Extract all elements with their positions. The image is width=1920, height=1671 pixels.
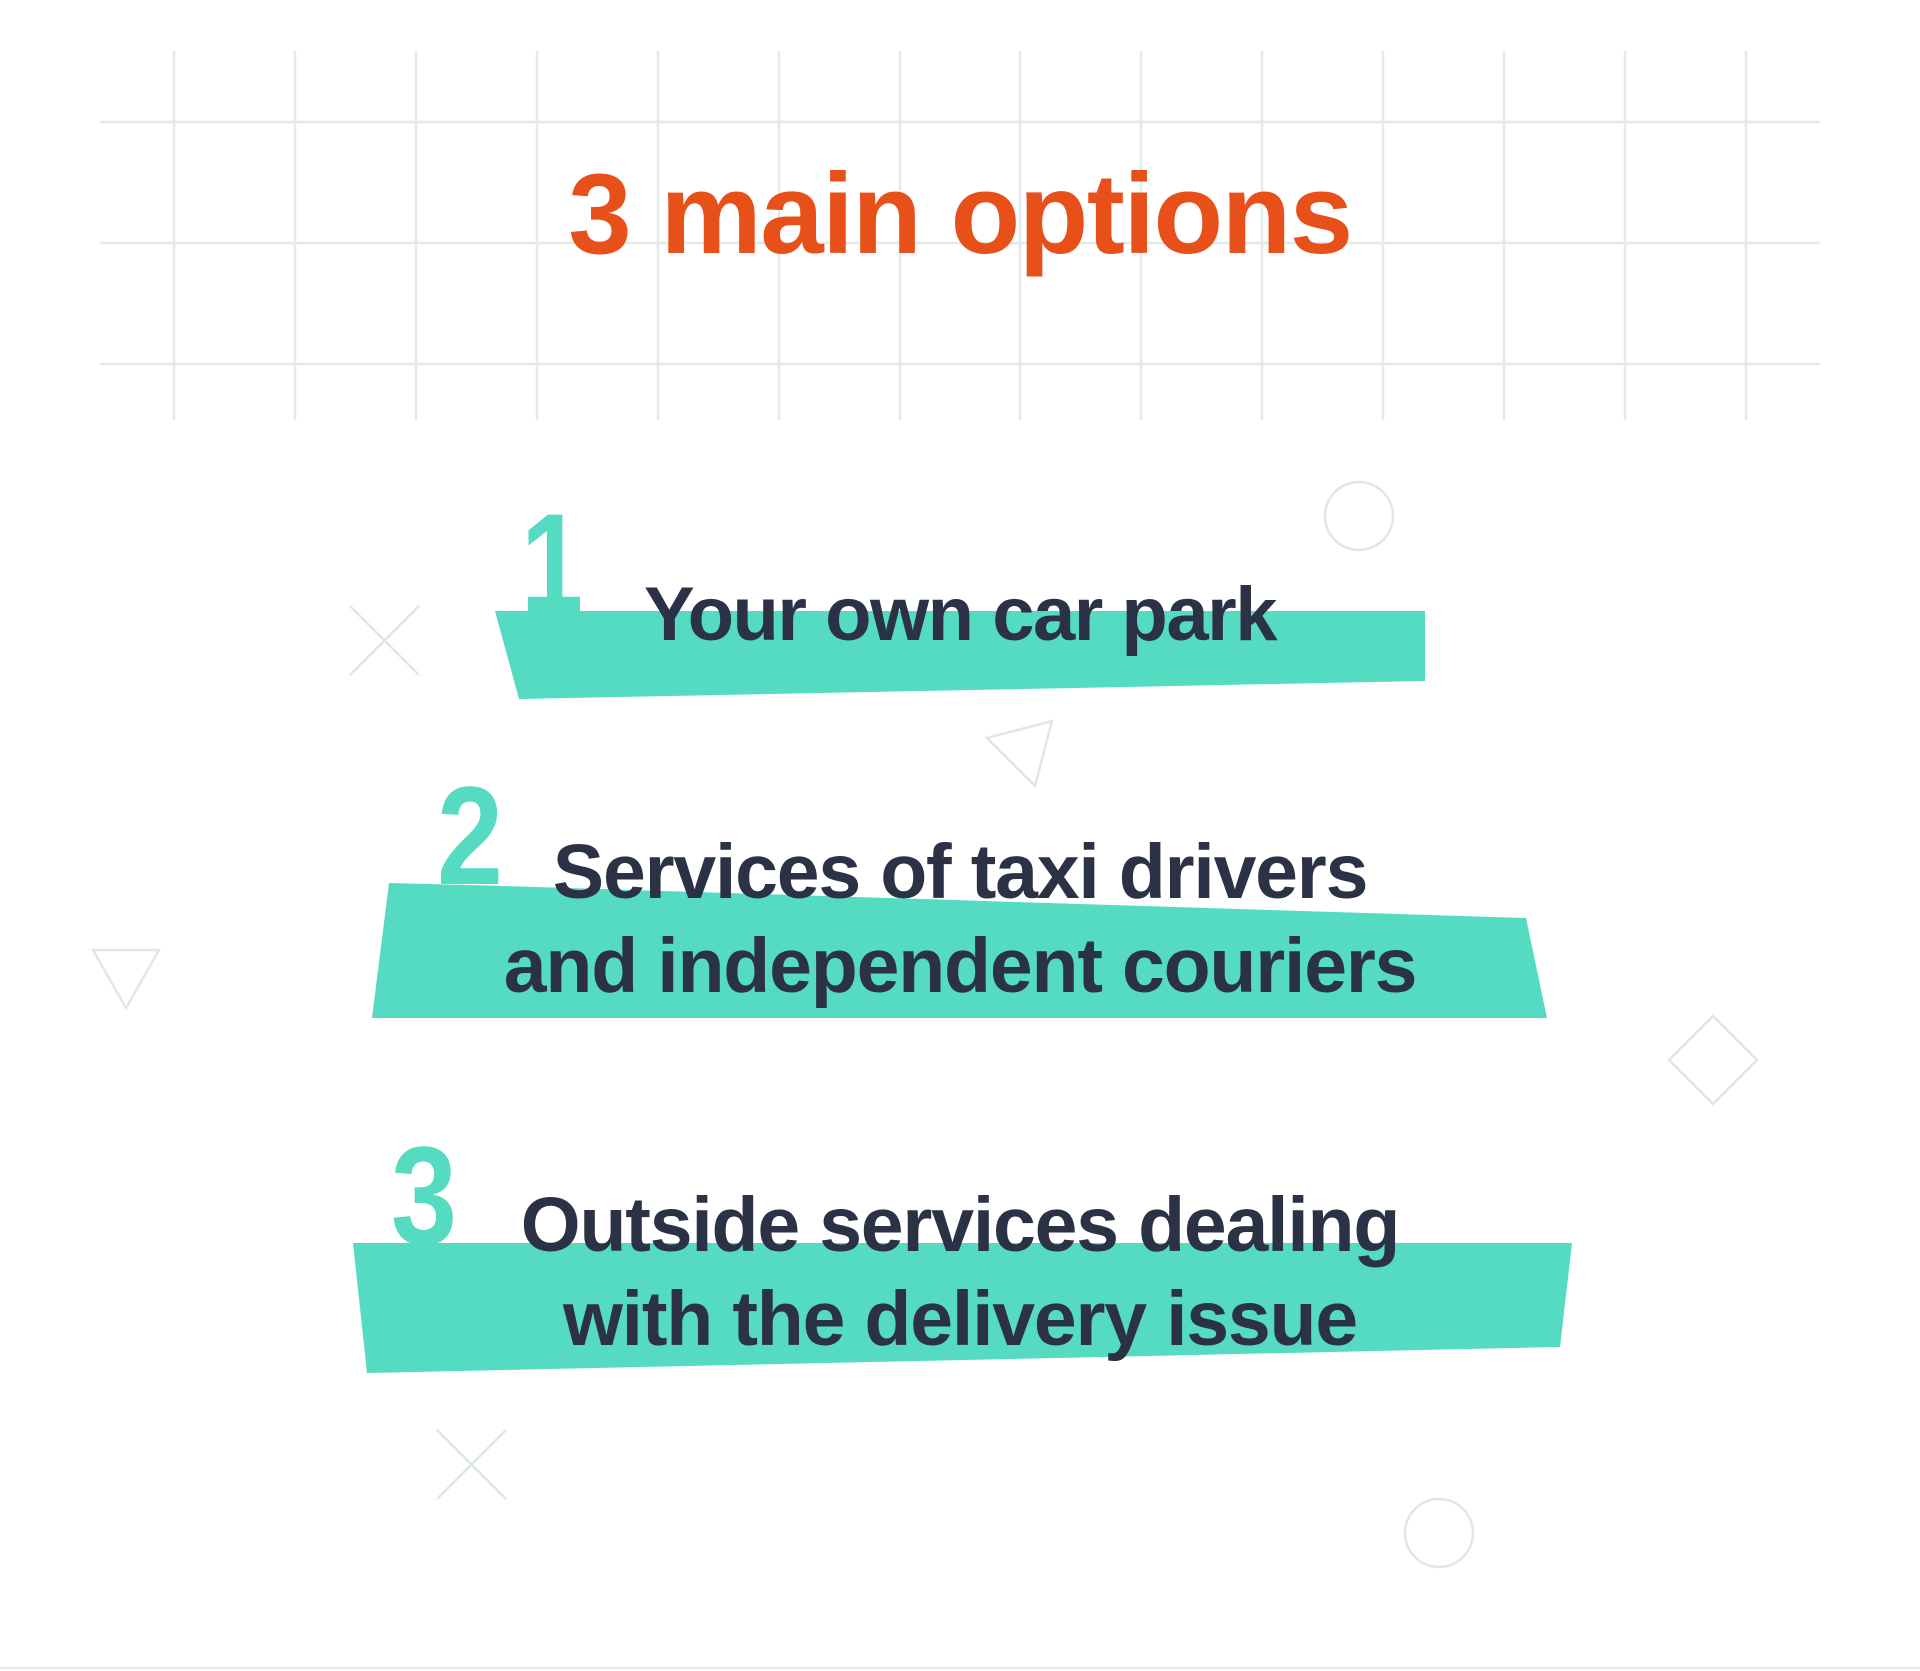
title: 3 main options	[568, 151, 1352, 278]
option 3	[353, 1117, 1572, 1373]
option 2: and independent couriers	[504, 923, 1416, 1009]
number 2: 2	[437, 757, 503, 914]
decoration: circle top	[1325, 482, 1393, 550]
banner 3	[353, 1243, 1572, 1373]
number 3: 3	[391, 1117, 457, 1274]
banner 1	[495, 611, 1425, 699]
label 2: Services of taxi drivers	[553, 829, 1367, 915]
banner 2	[372, 883, 1547, 1018]
decoration: diamond	[1669, 1016, 1757, 1104]
label 3: Outside services dealing	[521, 1182, 1399, 1268]
decoration: x left	[350, 606, 419, 675]
decoration: x bottom	[437, 1430, 506, 1499]
decoration: triangle middle	[987, 721, 1052, 786]
decoration: circle bottom	[1405, 1499, 1473, 1567]
option 2	[372, 757, 1547, 1018]
option 1	[495, 484, 1425, 699]
option 3: with the delivery issue	[562, 1276, 1357, 1362]
label 1: Your own car park	[644, 572, 1278, 657]
number 1: 1	[521, 484, 583, 641]
decoration: triangle left	[93, 950, 159, 1008]
